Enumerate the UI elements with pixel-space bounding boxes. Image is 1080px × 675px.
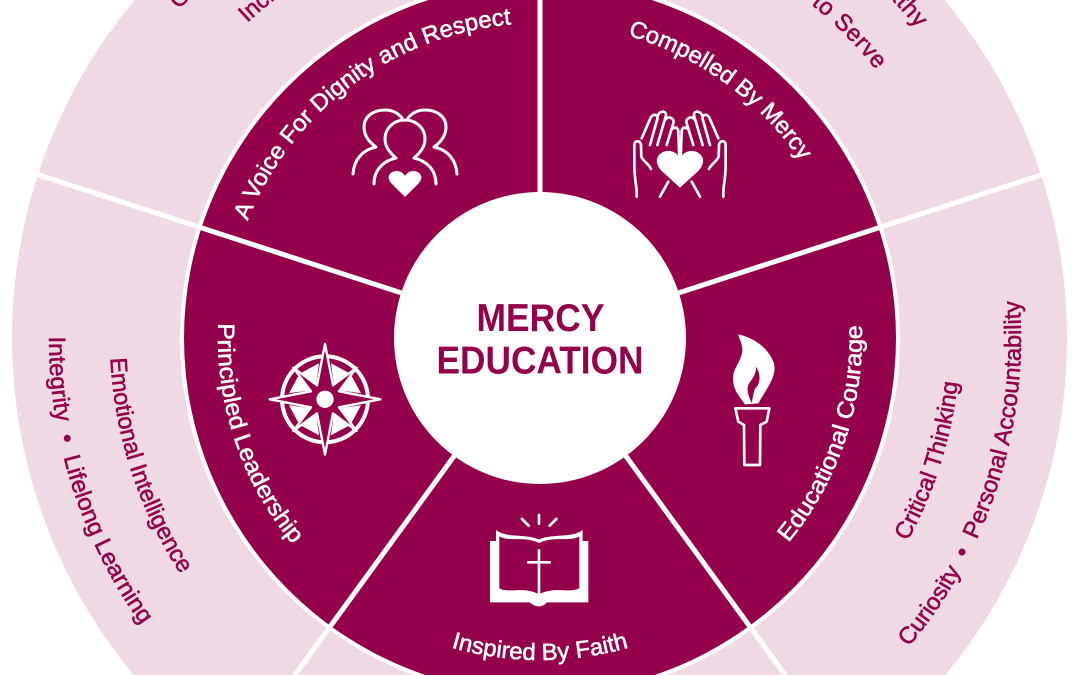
icon: three people with heart bbox=[353, 110, 457, 197]
center circle bbox=[394, 192, 686, 484]
value: Curiosity and Personal Accountability: Curiosity • Personal Accountability bbox=[899, 301, 1026, 644]
title: Mercy Education bbox=[438, 304, 642, 374]
value: Emotional Intelligence: Emotional Intelligence bbox=[110, 358, 190, 572]
value: Critical Thinking: Critical Thinking bbox=[896, 382, 962, 538]
icon: torch bbox=[733, 334, 775, 465]
white gap ring bbox=[180, 0, 900, 675]
pillar label: A Voice For Dignity and Respect: A Voice For Dignity and Respect bbox=[235, 9, 512, 222]
title: Mercy Education: EDUCATION bbox=[436, 340, 644, 382]
pillar label: Inspired By Faith: Inspired By Faith bbox=[452, 632, 628, 664]
title: Mercy Education: MERCY bbox=[476, 297, 605, 340]
pillar label: Educational Courage: Educational Courage bbox=[776, 326, 868, 542]
value: Integrity and Lifelong Learning: Integrity • Lifelong Learning bbox=[46, 338, 152, 625]
icon: hands holding heart bbox=[634, 112, 726, 197]
pillar label: Principled Leadership: Principled Leadership bbox=[216, 324, 300, 542]
icon: compass star bbox=[270, 344, 380, 455]
icon: open book with cross bbox=[490, 515, 588, 606]
pillar label: Compelled By Mercy: Compelled By Mercy bbox=[630, 22, 812, 158]
dark inner ring of pillars bbox=[184, 0, 896, 675]
